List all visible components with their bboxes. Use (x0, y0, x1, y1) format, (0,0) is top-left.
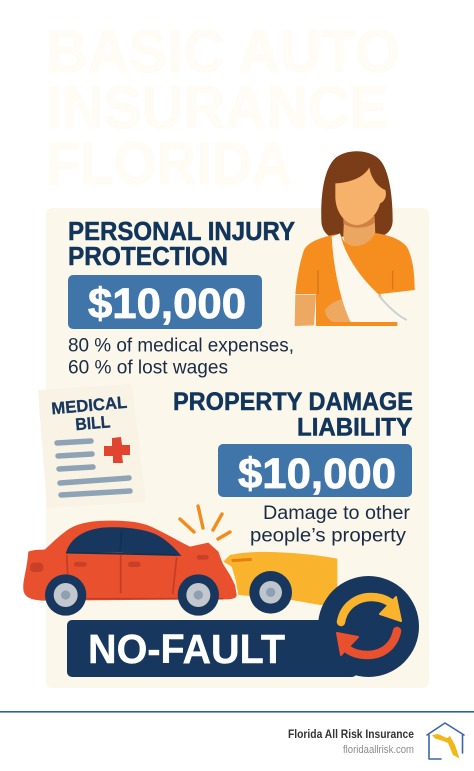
title: BASIC AUTO (46, 18, 400, 85)
icon: no-fault cycle arrows (318, 576, 419, 677)
heading: personal injury protection: PROTECTION (68, 243, 228, 271)
banner: no-fault: NO-FAULT (88, 626, 285, 672)
footer: company name and site (288, 727, 414, 756)
illustration: injured woman in arm sling (295, 151, 415, 326)
footer: company name and site: Florida All Risk Insurance (288, 727, 414, 741)
icon: medical bill: BILL (75, 412, 111, 434)
amount badge: PIP $10,000: $10,000 (88, 280, 246, 328)
panel: coverage background (46, 208, 429, 688)
text: PIP coverage detail (68, 336, 294, 378)
logo: house with Florida (427, 723, 464, 759)
heading: property damage liability: LIABILITY (297, 414, 412, 442)
title: FLORIDA (46, 130, 292, 197)
footer divider (0, 711, 474, 713)
heading: personal injury protection (68, 218, 295, 271)
text: property damage detail (250, 503, 411, 546)
banner: no-fault (67, 620, 357, 677)
illustration: yellow car hit (223, 552, 337, 614)
text: property damage detail: Damage to other (263, 503, 411, 524)
title (46, 18, 400, 197)
text: PIP coverage detail: 80 % of medical expenses, (68, 336, 294, 356)
footer: company name and site: floridaallrisk.com (343, 744, 414, 756)
title: INSURANCE (46, 74, 388, 141)
icon: medical bill (38, 384, 146, 508)
heading: property damage liability (173, 388, 413, 442)
heading: personal injury protection: PERSONAL INJURY (68, 218, 295, 246)
illustration: red car with crash (23, 521, 237, 616)
text: PIP coverage detail: 60 % of lost wages (68, 358, 228, 378)
text: property damage detail: people’s property (250, 526, 407, 546)
icon: crash impact spark lines (180, 506, 230, 539)
heading: property damage liability: PROPERTY DAMAGE (173, 388, 413, 416)
amount badge: property damage $10,000: $10,000 (238, 450, 396, 498)
icon: medical bill: MEDICAL (51, 393, 128, 418)
